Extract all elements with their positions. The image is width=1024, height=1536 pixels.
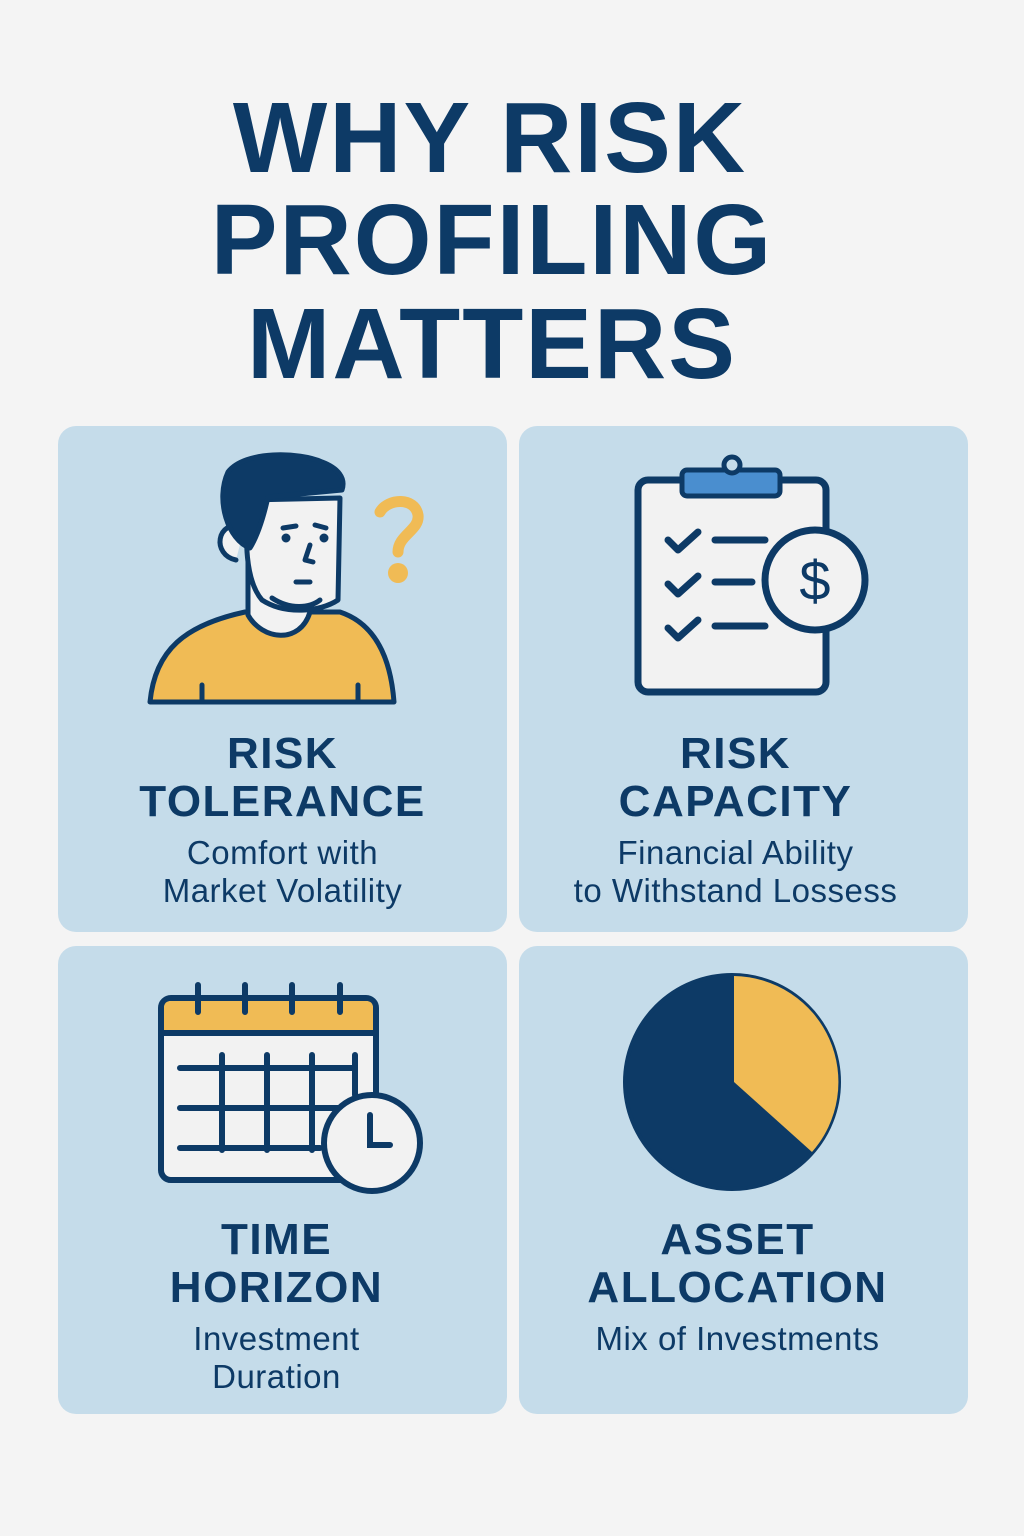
heading: risk capacity: RISK bbox=[680, 729, 791, 778]
text: comfort with market volatility bbox=[163, 834, 402, 909]
heading: risk tolerance: RISK bbox=[227, 729, 338, 778]
heading: asset allocation bbox=[587, 1215, 888, 1312]
heading: time horizon: HORIZON bbox=[170, 1263, 383, 1312]
icon: person with question mark bbox=[150, 455, 394, 702]
text: investment duration: Duration bbox=[212, 1358, 341, 1395]
heading: asset allocation: ALLOCATION bbox=[587, 1263, 888, 1312]
text: comfort with market volatility: Comfort with bbox=[187, 834, 378, 871]
heading: risk capacity: CAPACITY bbox=[619, 777, 852, 826]
text: $ bbox=[799, 549, 831, 612]
panel: time horizon bbox=[58, 946, 507, 1414]
text: financial ability: to Withstand Lossess bbox=[574, 872, 897, 909]
title: PROFILING bbox=[211, 184, 773, 296]
title bbox=[211, 82, 773, 400]
icon: calendar with clock bbox=[161, 985, 420, 1191]
text: investment duration bbox=[193, 1320, 360, 1395]
heading: time horizon: TIME bbox=[221, 1215, 332, 1264]
panel: risk capacity bbox=[519, 426, 968, 932]
heading: time horizon bbox=[170, 1215, 383, 1312]
heading: risk tolerance: TOLERANCE bbox=[139, 777, 426, 826]
icon: clipboard with dollar bbox=[638, 457, 865, 692]
text: financial ability: Financial Ability bbox=[618, 834, 853, 871]
icon: pie chart bbox=[625, 975, 839, 1189]
panel: risk tolerance bbox=[58, 426, 507, 932]
heading: risk capacity bbox=[619, 729, 852, 826]
text: comfort with market volatility: Market Volatility bbox=[163, 872, 402, 909]
heading: asset allocation: ASSET bbox=[660, 1215, 815, 1264]
text: mix of investments: Mix of Investments bbox=[595, 1320, 880, 1357]
title: WHY RISK bbox=[233, 82, 747, 194]
text: financial ability bbox=[574, 834, 897, 909]
title: MATTERS bbox=[247, 288, 737, 400]
heading: risk tolerance bbox=[139, 729, 426, 826]
panel: asset allocation bbox=[519, 946, 968, 1414]
text: investment duration: Investment bbox=[193, 1320, 360, 1357]
